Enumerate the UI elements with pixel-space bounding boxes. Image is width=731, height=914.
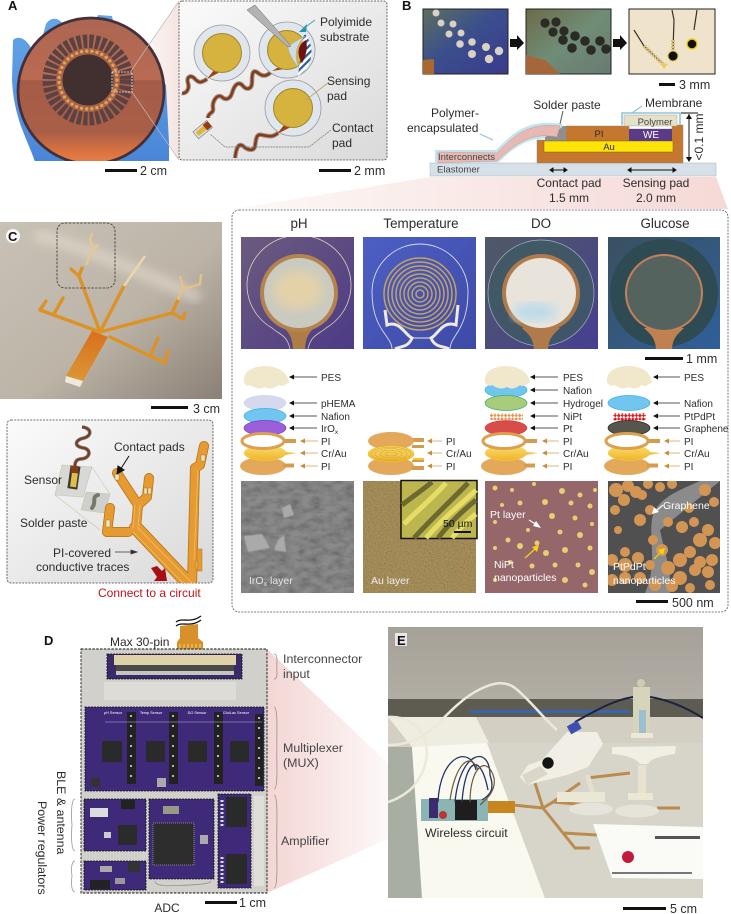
sensor 3 xyxy=(235,80,321,158)
interconnect encapsulation xyxy=(435,123,566,163)
column titles: Glucose xyxy=(640,216,690,231)
layer labels: DO: PI xyxy=(563,437,572,448)
arrow 2 xyxy=(613,35,627,50)
white sheet xyxy=(412,743,545,898)
panel: sensor details frame xyxy=(232,210,729,612)
label: sensing pad: Sensing xyxy=(327,74,370,88)
orange tree xyxy=(107,446,204,586)
layer labels: DO xyxy=(563,373,603,473)
arrow: traces xyxy=(115,550,137,554)
labels: D right: Interconnector xyxy=(283,652,362,666)
scale bar 500 nm: 500 nm xyxy=(672,596,714,610)
labels: C inset: conductive traces xyxy=(36,560,129,574)
labels: D right: input xyxy=(283,667,310,681)
layer labels: glucose: Nafion xyxy=(684,399,713,410)
column titles: pH xyxy=(290,216,308,231)
arrows: temperature xyxy=(427,438,442,468)
layer labels: pH: PI xyxy=(321,462,330,473)
layer stack: DO xyxy=(481,366,538,475)
label: contact pad: Contact xyxy=(332,121,374,135)
interconnect xyxy=(438,125,560,163)
multiplexer board: pH Sensor xyxy=(104,711,123,715)
layer stack: pH xyxy=(240,366,297,475)
left tinted slab xyxy=(388,747,422,898)
sensor 1 xyxy=(182,25,250,93)
interconnector board xyxy=(107,654,242,679)
SEM: Au layer with inset xyxy=(363,480,477,593)
labels: cross section: Contact pad xyxy=(537,176,601,190)
layer labels: glucose xyxy=(684,373,729,473)
zoom boxes: sensor and solder paste xyxy=(55,465,110,530)
layer labels: pH: pHEMA xyxy=(321,399,356,410)
label E: E xyxy=(397,633,406,648)
amplifier board xyxy=(218,794,251,888)
contact pad marks xyxy=(106,455,205,569)
labels: PtPdPt SEM xyxy=(613,500,710,587)
membrane xyxy=(622,113,680,125)
zoom cone: panel D to E xyxy=(267,649,388,893)
multiplexer board: Temp Sensor xyxy=(140,711,163,715)
labels: cross section: encapsulated xyxy=(407,121,478,135)
layer labels: DO: Cr/Au xyxy=(563,449,589,460)
labels: cross section xyxy=(407,96,706,205)
sensor 2 with peeling layer xyxy=(208,22,315,118)
dashed highlight box xyxy=(57,223,115,288)
labels: D right: (MUX) xyxy=(283,756,319,770)
layer labels: temperature: PI xyxy=(446,462,455,473)
labels: cross section: Membrane xyxy=(645,96,703,110)
scale bar 3 mm: 3 mm xyxy=(679,78,710,92)
polymer xyxy=(624,115,677,126)
column titles: DO xyxy=(531,216,551,231)
board outline and substrate xyxy=(81,649,267,893)
camera/sensor white device xyxy=(520,721,603,785)
clear film xyxy=(487,743,544,895)
photo 3: released sensors xyxy=(629,9,715,74)
scale bar 2 cm: 2 cm xyxy=(140,164,167,178)
contact pad xyxy=(193,120,212,139)
connect to a circuit label: Connect to a circuit xyxy=(98,586,201,600)
layer stack: temperature xyxy=(368,432,424,475)
labels: cross section: WE xyxy=(643,130,659,141)
inset: sensor array drawing xyxy=(179,1,387,160)
red arrow xyxy=(151,566,167,581)
WE xyxy=(629,129,672,141)
arrow: polyimide xyxy=(306,20,316,27)
SEM: IrOx layer xyxy=(241,481,354,593)
scale bar 1 mm xyxy=(645,352,717,366)
layer labels: glucose: PI xyxy=(684,462,693,473)
SEM: IrOx layer: layer xyxy=(267,575,293,587)
scale bar 3 cm: 3 cm xyxy=(193,402,220,416)
layer labels: temperature xyxy=(446,437,472,473)
scale bar 3 mm xyxy=(659,78,710,92)
background wall xyxy=(388,627,703,707)
scale bar 1 cm xyxy=(205,896,266,910)
stand left xyxy=(557,775,613,816)
layer labels: DO: PI xyxy=(563,462,572,473)
scale bar 2 mm: 2 mm xyxy=(354,164,385,178)
label: polyimide substrate: substrate xyxy=(320,30,370,44)
zoom lines xyxy=(131,1,179,160)
labels: cross section: Elastomer xyxy=(437,164,480,176)
label: sensing pad: pad xyxy=(327,89,347,103)
layer labels: pH: PES xyxy=(321,373,341,384)
SEM: IrOx layer: x xyxy=(264,581,268,588)
label: power regulators: Power regulators xyxy=(35,801,49,895)
layer labels: DO: Pt xyxy=(563,424,573,435)
layer labels: DO: Hydrogel xyxy=(563,399,603,410)
arrow 1 xyxy=(510,35,524,50)
layer labels: temperature: Cr/Au xyxy=(446,449,472,460)
labels: D right: Multiplexer xyxy=(283,741,343,755)
bracket arrows xyxy=(686,114,692,162)
power board xyxy=(84,861,146,890)
micrograph: pH xyxy=(241,235,354,349)
inset: gold rings: 50 µm xyxy=(443,518,473,530)
labels: NiPt SEM xyxy=(490,509,556,584)
side notch xyxy=(197,549,202,571)
labels: C inset: PI-covered xyxy=(53,546,111,560)
scale bar 5 cm xyxy=(623,902,697,914)
labels: cross section: 1.5 mm xyxy=(549,191,589,205)
label: contact pad: pad xyxy=(332,136,352,150)
layer labels: glucose: Cr/Au xyxy=(684,449,710,460)
ADC board xyxy=(149,799,214,879)
layer labels: pH xyxy=(321,373,356,473)
labels: D right xyxy=(281,652,362,848)
label: wireless circuit: Wireless circuit xyxy=(425,826,508,840)
panel C: flexible array photo xyxy=(0,222,222,416)
panel C inset: layout drawing xyxy=(7,420,213,586)
faint connector row xyxy=(104,682,236,700)
layer labels: glucose: PES xyxy=(684,373,704,384)
column titles xyxy=(290,216,690,231)
arrowhead: polyimide xyxy=(299,24,307,32)
labels: cross section: Polymer- xyxy=(431,106,479,120)
flexible cable icon xyxy=(176,616,203,653)
multiplexer board xyxy=(85,707,264,791)
rail xyxy=(388,699,703,717)
BLE board xyxy=(84,799,146,851)
arrows: DO xyxy=(530,374,559,468)
Au layer xyxy=(544,141,673,152)
micrograph: DO xyxy=(485,237,598,349)
printed tree on film xyxy=(513,773,703,848)
circuit board and jumpers xyxy=(421,757,494,821)
labels: cross section: Polymer xyxy=(638,117,672,128)
layer labels: pH: PI xyxy=(321,437,330,448)
arrow: encapsulated xyxy=(480,134,493,140)
elastomer xyxy=(430,163,716,176)
photo 1: bare pads xyxy=(423,9,508,74)
panel B: fabrication and cross section xyxy=(402,0,716,205)
scale bar 2 mm xyxy=(319,164,385,178)
arrows: glucose xyxy=(653,374,680,468)
label C: C xyxy=(8,229,18,244)
labels: C inset: Sensor xyxy=(24,473,62,487)
labels: NiPt SEM: Pt layer xyxy=(490,509,526,521)
labels: D right: Amplifier xyxy=(281,834,329,848)
multiplexer board: DO Sensor xyxy=(188,711,207,715)
arrow: membrane xyxy=(632,106,642,113)
SEM: NiPt nanoparticles xyxy=(485,481,598,593)
panel A: wafer photo and inset xyxy=(8,0,387,178)
layer labels: temperature: PI xyxy=(446,437,455,448)
label: BLE and antenna: BLE & antenna xyxy=(54,771,68,854)
layer labels: glucose: PI xyxy=(684,437,693,448)
labels: cross section: Interconnects xyxy=(438,152,495,163)
layer labels: glucose: PtPdPt xyxy=(684,412,715,423)
photo of sensor tree xyxy=(0,222,222,399)
leader: sensing pad xyxy=(306,82,329,100)
panel D: circuit board xyxy=(35,616,362,914)
tweezers xyxy=(247,5,291,47)
scale bar 1 mm: 1 mm xyxy=(686,352,717,366)
layer labels: pH: x xyxy=(335,429,339,436)
micrograph: temperature spiral xyxy=(363,237,476,349)
film cable xyxy=(488,801,515,813)
label C xyxy=(6,229,20,244)
labels: C inset: Contact pads xyxy=(114,440,185,454)
layer labels: pH: IrO xyxy=(321,424,335,435)
layer stack: glucose xyxy=(604,366,661,475)
label D: D xyxy=(44,633,53,648)
labels: PtPdPt SEM: PtPdPt xyxy=(613,561,646,573)
labels: PtPdPt SEM: Graphene xyxy=(663,500,710,512)
leader: contact pad xyxy=(210,130,331,147)
arrow: contact pads xyxy=(117,456,129,474)
panel E: test rig photo xyxy=(388,627,703,898)
layer labels: pH: Cr/Au xyxy=(321,449,347,460)
SEM: PtPdPt nanoparticles xyxy=(606,479,721,593)
multiplexer board: Glu/Lac Sensor xyxy=(223,711,250,715)
sensor trace xyxy=(67,427,90,490)
layer labels: DO: PES xyxy=(563,373,583,384)
zoom cone: panel A xyxy=(131,1,179,160)
SEM: IrOx layer: IrO xyxy=(249,575,264,587)
bench xyxy=(388,717,703,898)
label: max 30-pin: Max 30-pin xyxy=(110,635,169,649)
labels: C inset: Solder paste xyxy=(20,516,88,530)
layer labels: glucose: Graphene xyxy=(684,424,729,435)
labels: C inset xyxy=(20,440,185,574)
labels: NiPt SEM: NiPt xyxy=(494,559,514,571)
labels: cross section: PI xyxy=(595,129,603,140)
brackets xyxy=(72,654,277,892)
photo 2: coated pads xyxy=(526,9,611,74)
layer labels: DO: Nafion xyxy=(563,386,592,397)
labels: cross section: Au xyxy=(603,142,615,153)
height bracket xyxy=(681,113,698,161)
wafer photo xyxy=(12,15,170,164)
scale bar 2 cm xyxy=(105,164,167,178)
arrows: pH xyxy=(289,374,318,468)
column titles: Temperature xyxy=(383,216,459,231)
tubing xyxy=(388,683,557,802)
labels: cross section: Sensing pad xyxy=(623,176,689,190)
labels: PtPdPt SEM: nanoparticles xyxy=(613,575,675,587)
labels: cross section: Solder paste xyxy=(533,98,601,112)
solder paste xyxy=(545,126,566,141)
scale bar 1 cm: 1 cm xyxy=(239,896,266,910)
labels: cross section: <0.1 mm xyxy=(692,113,706,161)
label: polyimide substrate: Polyimide xyxy=(320,15,372,29)
dimension arrows xyxy=(550,168,676,172)
zoom cone: panel B to sensors xyxy=(235,177,728,209)
labels: cross section: 2.0 mm xyxy=(636,191,676,205)
right header strip xyxy=(254,796,264,886)
labels: NiPt SEM: nanoparticles xyxy=(494,572,556,584)
black cable xyxy=(575,697,703,722)
cross section diagram xyxy=(430,113,716,176)
arrow: solder paste xyxy=(560,111,563,124)
layer labels: pH: Nafion xyxy=(321,412,350,423)
micrograph: glucose xyxy=(608,237,720,349)
scale bar 3 cm xyxy=(151,402,220,416)
syringe stand right xyxy=(612,679,676,818)
scale bar 500 nm xyxy=(636,596,714,610)
left white area xyxy=(388,717,490,747)
layer labels: DO: NiPt xyxy=(563,412,582,423)
paper label xyxy=(593,824,703,879)
SEM: Au layer with inset: Au layer xyxy=(371,575,410,587)
base polyimide xyxy=(537,125,683,163)
